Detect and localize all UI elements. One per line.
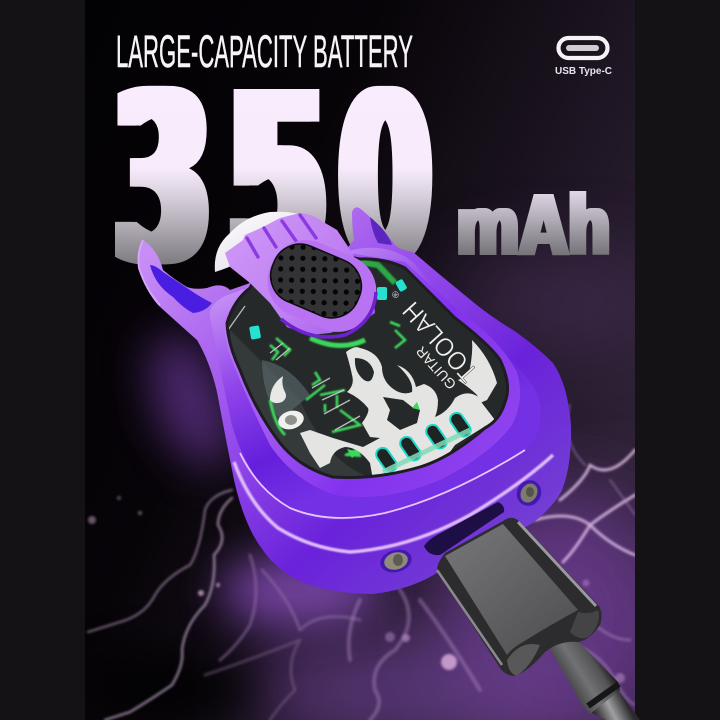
screw right <box>512 476 546 510</box>
infographic canvas <box>85 0 640 720</box>
white dashes <box>228 306 360 430</box>
icon: USB-C port <box>558 38 608 58</box>
flame finger slots <box>374 410 473 474</box>
strain relief sleeve <box>545 635 620 714</box>
USB Type-C badge <box>555 38 612 77</box>
device body shell <box>138 207 571 594</box>
screw left <box>378 546 414 576</box>
background panel <box>85 0 635 720</box>
big number 350: 350 <box>115 43 451 318</box>
window screw <box>278 410 304 430</box>
textured black button <box>262 235 370 327</box>
inner bezel <box>222 254 520 497</box>
purple comb lever <box>225 213 388 343</box>
outer lower highlight line <box>234 455 553 552</box>
clear window with circuit board: ® <box>389 288 401 300</box>
unit mAh: mAh <box>456 178 611 276</box>
circuit traces <box>270 262 405 456</box>
raised rim <box>210 248 541 520</box>
left horn cut-out <box>150 265 212 313</box>
white flame graphic <box>300 340 497 480</box>
infographic canvas: LARGE-CAPACITY BATTERY <box>116 26 413 77</box>
USB Type-C label: USB Type-C <box>555 65 612 77</box>
cyan LEDs <box>249 279 407 340</box>
white dome behind lever <box>215 212 330 272</box>
lightning bolts <box>88 405 635 720</box>
USB-C charging cable <box>437 518 640 720</box>
right horn cut-out <box>370 217 392 245</box>
device: guitar-shaped gadget <box>138 207 571 594</box>
clear window with circuit board <box>228 260 506 476</box>
USB port slot <box>424 502 504 555</box>
plug housing <box>437 518 602 676</box>
button surround <box>256 229 388 343</box>
cable <box>590 690 640 720</box>
clear window with circuit board: TOOLAH <box>396 296 483 388</box>
brand text on board: GUITAR <box>413 343 459 393</box>
